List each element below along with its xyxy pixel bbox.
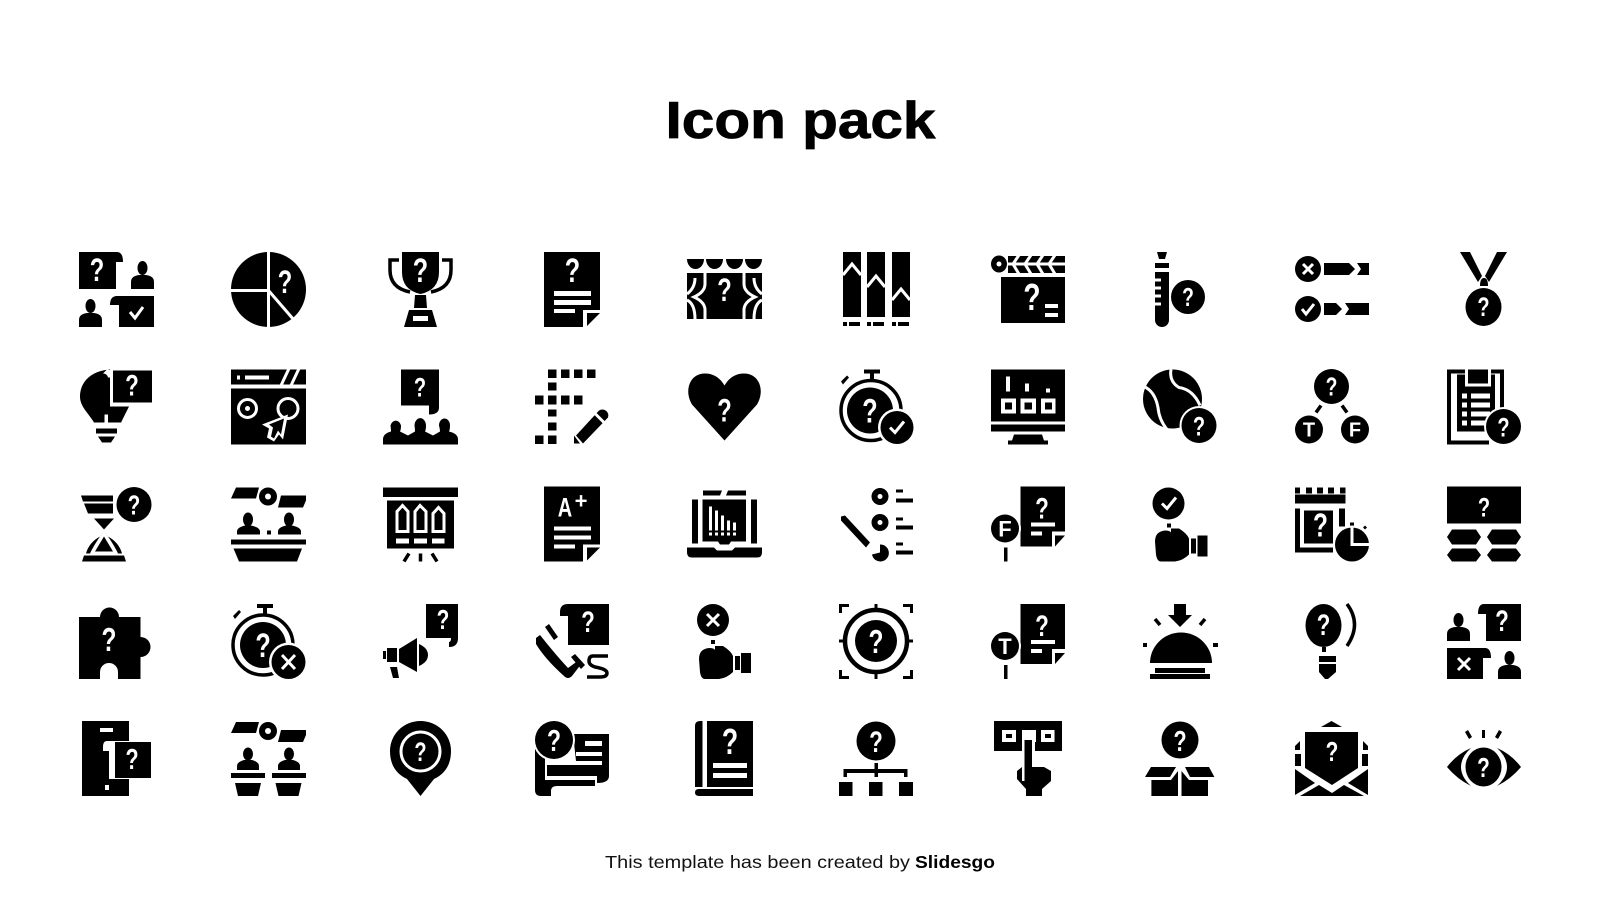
icon: tennis ball question: ? (1193, 412, 1205, 442)
icon: letter question: ? (1326, 737, 1338, 768)
icon: eye question (1447, 730, 1521, 786)
icon: boxing glove check (1152, 488, 1208, 562)
icon: box question (1145, 722, 1214, 796)
icon: quiz answer tiles (1447, 486, 1521, 562)
icon: laptop chart (687, 490, 762, 558)
icon: target question: ? (869, 625, 883, 661)
icon: false answer document: F (998, 516, 1012, 542)
icon: phone call question: ? (581, 605, 595, 639)
icon: stopwatch cross (233, 604, 308, 682)
icon: graded test document (544, 486, 600, 562)
icon: letter question (1295, 721, 1368, 796)
icon: pie chart question: ? (278, 265, 292, 300)
icon: rising bars (843, 252, 910, 326)
icon: true false tree: T (1303, 420, 1315, 442)
icon: hierarchy question: ? (869, 725, 883, 759)
icon: test tube: ? (1182, 282, 1194, 312)
icon: hourglass question (81, 487, 152, 562)
icon: heart question: ? (717, 393, 732, 428)
footer credit: Slidesgo (915, 852, 995, 872)
icon: book question: ? (722, 721, 738, 762)
icon: megaphone question: ? (437, 605, 449, 636)
icon: theatre stage (687, 259, 762, 320)
icon: true false tree: F (1349, 420, 1361, 442)
icon: trophy: ? (413, 252, 428, 290)
title: Icon pack (666, 92, 936, 150)
icon: debate podium (231, 488, 306, 562)
icon: true false tree (1295, 369, 1369, 444)
icon: audience question (383, 370, 458, 444)
icon: magnifier question (1306, 604, 1354, 679)
icon: pie chart question (231, 252, 306, 327)
icon: map pin question (390, 721, 451, 796)
icon: box question: ? (1173, 726, 1187, 758)
icon: calendar timer (1295, 488, 1371, 564)
icon: tennis ball question (1143, 370, 1218, 445)
icon: presentation board (383, 488, 458, 562)
icon: audience question: ? (414, 373, 426, 403)
icon: medal (1460, 252, 1507, 326)
icon: calendar timer: ? (1313, 508, 1328, 544)
icon: graded test document: + (575, 488, 587, 514)
icon: crossword and pencil (535, 370, 608, 444)
icon: monitor chart (991, 370, 1065, 444)
icon: false answer document (989, 486, 1065, 562)
icon: hourglass question: ? (128, 491, 140, 521)
icon: light bulb idea (80, 368, 154, 442)
icon: medal: ? (1477, 292, 1490, 323)
icon: browser click (231, 368, 306, 444)
icon: magnifier question: ? (1317, 608, 1330, 642)
icon: document question: ? (565, 252, 580, 290)
icon: stopwatch check: ? (862, 393, 878, 430)
icon: clapperboard (991, 255, 1066, 323)
icon: test tube (1155, 252, 1207, 327)
icon: book question (695, 721, 753, 796)
icon: map pin question: ? (414, 737, 427, 768)
icon: light bulb idea: ? (125, 368, 139, 402)
icon: megaphone question (383, 604, 458, 678)
icon: hierarchy question (839, 722, 913, 796)
icon: puzzle piece (79, 608, 150, 679)
icon: stopwatch check (841, 370, 916, 446)
icon: service bell (1143, 604, 1218, 679)
icon: true false tree: ? (1326, 372, 1337, 401)
icon: graded test document: A (558, 493, 572, 523)
icon: true answer document (989, 604, 1065, 679)
icon: document question (544, 252, 600, 327)
icon: true answer document: ? (1035, 609, 1049, 643)
icon: smartphone question: ? (125, 744, 139, 776)
icon: people answering wrong (1447, 604, 1521, 679)
icon: phone call question (536, 604, 609, 678)
icon: boxing glove cross (697, 604, 751, 679)
icon: scroll question: ? (547, 723, 561, 758)
icon: false answer document: ? (1035, 491, 1049, 525)
icon: people answering wrong: ? (1495, 604, 1509, 638)
icon: true false options (1295, 256, 1369, 322)
icon: people exchanging question and answer (79, 252, 154, 327)
icon: eye question: ? (1477, 753, 1490, 784)
icon: puzzle piece: ? (102, 623, 116, 659)
footer credit (605, 852, 995, 872)
icon: target question (839, 604, 913, 679)
icon: clipboard question (1447, 370, 1523, 446)
icon: trophy (390, 252, 451, 327)
icon: stopwatch cross: ? (255, 627, 271, 665)
footer credit: This template has been created by (605, 852, 910, 872)
icon: hand choosing option (994, 721, 1062, 796)
icon: smartphone question (82, 721, 152, 796)
icon: quiz answer tiles: ? (1478, 493, 1490, 523)
icon: clapperboard: ? (1023, 277, 1041, 319)
icon: two podiums (231, 722, 306, 796)
icon: theatre stage: ? (717, 273, 732, 308)
icon: people exchanging question and answer: ? (90, 253, 104, 288)
icon: scroll question (533, 719, 609, 796)
icon: true answer document: T (998, 634, 1012, 659)
icon: tick list and pen (841, 488, 913, 561)
icon: heart question (688, 374, 761, 440)
icon: clipboard question: ? (1497, 413, 1510, 443)
